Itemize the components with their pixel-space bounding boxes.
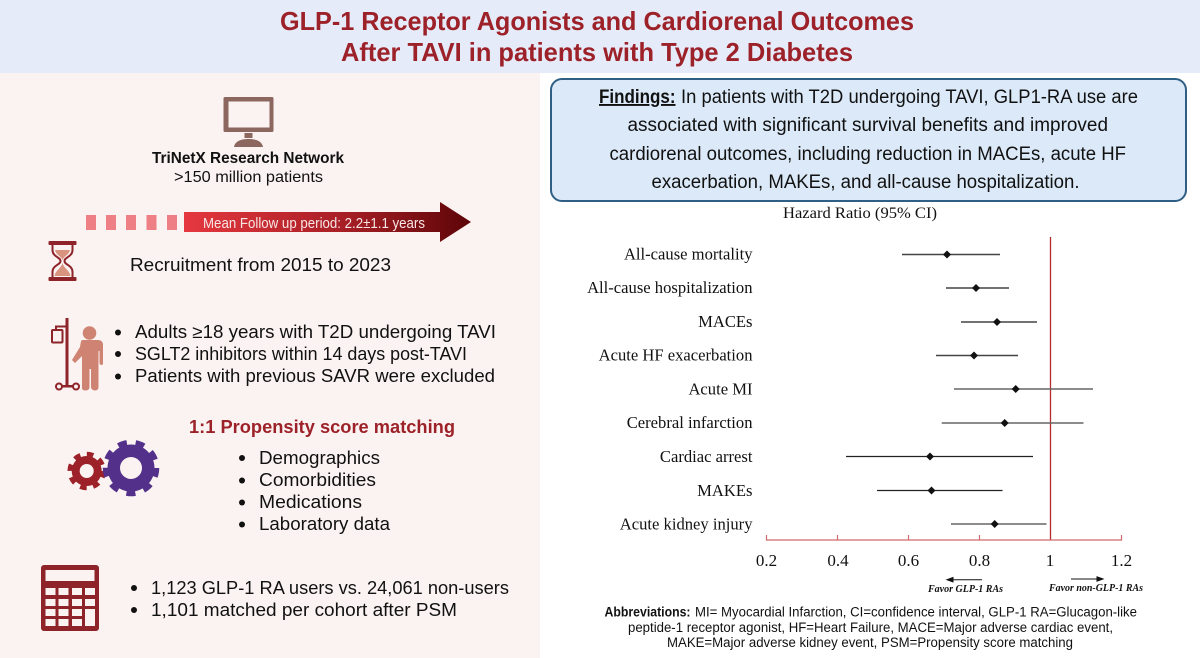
row: acute HF exacerbation: Acute HF exacerbation	[599, 346, 753, 364]
findings text	[599, 87, 1138, 193]
matching variables list: Comorbidities	[259, 470, 376, 490]
row: all-cause hospitalization	[587, 278, 1009, 297]
inclusion criteria list: Patients with previous SAVR were excluded	[135, 366, 495, 386]
row: acute MI	[688, 380, 1093, 398]
icon: hourglass	[48, 241, 76, 281]
matching variables list: Laboratory data	[259, 514, 391, 534]
x axis labels: 0.4	[827, 551, 849, 570]
dashed lead-in of timeline	[86, 215, 177, 230]
row: cardiac arrest	[660, 447, 1033, 466]
matching variables list: Demographics	[259, 448, 380, 468]
cohort numbers list	[131, 578, 509, 620]
findings text: In patients with T2D undergoing TAVI, GLP1-RA use are	[681, 87, 1138, 108]
favor non-GLP-1 RAs annotation	[1048, 577, 1143, 594]
x axis labels: 0.8	[969, 551, 990, 570]
row: all-cause hospitalization: All-cause hospitalization	[587, 278, 753, 297]
follow-up arrow: Mean Follow up period: 2.2±1.1 years	[203, 216, 425, 232]
findings text: Findings:	[599, 87, 676, 108]
icon: computer monitor	[224, 97, 274, 147]
row: acute HF exacerbation	[599, 346, 1018, 364]
x axis labels	[756, 551, 1132, 570]
cohort numbers list: 1,101 matched per cohort after PSM	[151, 600, 457, 620]
inclusion criteria list	[115, 322, 496, 386]
findings text: exacerbation, MAKEs, and all-cause hospitalization.	[652, 172, 1080, 193]
favor non-GLP-1 RAs annotation: Favor non-GLP-1 RAs	[1048, 583, 1143, 594]
row: cardiac arrest: Cardiac arrest	[660, 447, 753, 466]
abbreviations note: Abbreviations:	[604, 604, 690, 620]
abbreviations note: MAKE=Major adverse kidney event, PSM=Propensity score matching	[667, 635, 1073, 650]
icon: patient with IV stand	[52, 318, 103, 390]
row: acute MI: Acute MI	[688, 380, 752, 398]
x axis labels: 1	[1046, 551, 1054, 570]
row: MAKEs: MAKEs	[697, 481, 752, 500]
row: cerebral infarction	[627, 413, 1084, 432]
matching variables list: Medications	[259, 492, 362, 512]
data source text: TriNetX Research Network	[152, 150, 344, 167]
propensity matching heading: 1:1 Propensity score matching	[189, 417, 455, 437]
abbreviations note	[604, 604, 1137, 650]
x axis	[766, 535, 1122, 540]
icon: large gear	[106, 442, 156, 494]
row: cerebral infarction: Cerebral infarction	[627, 413, 753, 432]
recruitment text: Recruitment from 2015 to 2023	[130, 254, 391, 275]
inclusion criteria list: Adults ≥18 years with T2D undergoing TAVI	[135, 322, 496, 342]
row: MACEs	[698, 312, 1037, 331]
x axis labels: 1.2	[1111, 551, 1132, 570]
title: GLP-1 Receptor Agonists and Cardiorenal Outcomes	[280, 6, 914, 36]
inclusion criteria list: SGLT2 inhibitors within 14 days post-TAVI	[135, 344, 467, 364]
row: MACEs: MACEs	[698, 312, 752, 331]
icon: small gear	[70, 454, 104, 488]
x axis labels: 0.2	[756, 551, 777, 570]
favor GLP-1 RAs annotation	[927, 578, 1003, 595]
abbreviations note: peptide-1 receptor agonist, HF=Heart Failure, MACE=Major adverse cardiac event,	[628, 620, 1113, 635]
matching variables list	[239, 448, 391, 534]
row: all-cause mortality: All-cause mortality	[624, 244, 753, 264]
forest plot title: Hazard Ratio (95% CI)	[783, 205, 937, 222]
title: After TAVI in patients with Type 2 Diabetes	[341, 37, 853, 67]
findings text: cardiorenal outcomes, including reduction in MACEs, acute HF	[610, 144, 1126, 165]
row: acute kidney injury: Acute kidney injury	[620, 514, 753, 534]
header banner	[0, 0, 1200, 73]
favor GLP-1 RAs annotation: Favor GLP-1 RAs	[927, 584, 1003, 595]
left panel background	[0, 73, 540, 658]
findings text: associated with significant survival benefits and improved	[628, 115, 1108, 136]
row: acute kidney injury	[620, 514, 1046, 534]
forest plot	[587, 205, 1143, 595]
findings box	[551, 79, 1186, 201]
follow-up arrow	[184, 202, 471, 242]
reference line at HR 1	[1050, 237, 1052, 540]
x axis labels: 0.6	[898, 551, 919, 570]
row: MAKEs	[697, 481, 1002, 500]
abbreviations note: MI= Myocardial Infarction, CI=confidence interval, GLP-1 RA=Glucagon-like	[695, 604, 1137, 620]
data source text: >150 million patients	[174, 169, 323, 186]
cohort numbers list: 1,123 GLP-1 RA users vs. 24,061 non-users	[151, 578, 509, 598]
data source text	[152, 150, 344, 186]
row: all-cause mortality	[624, 244, 1000, 264]
icon: calculator	[41, 565, 99, 631]
